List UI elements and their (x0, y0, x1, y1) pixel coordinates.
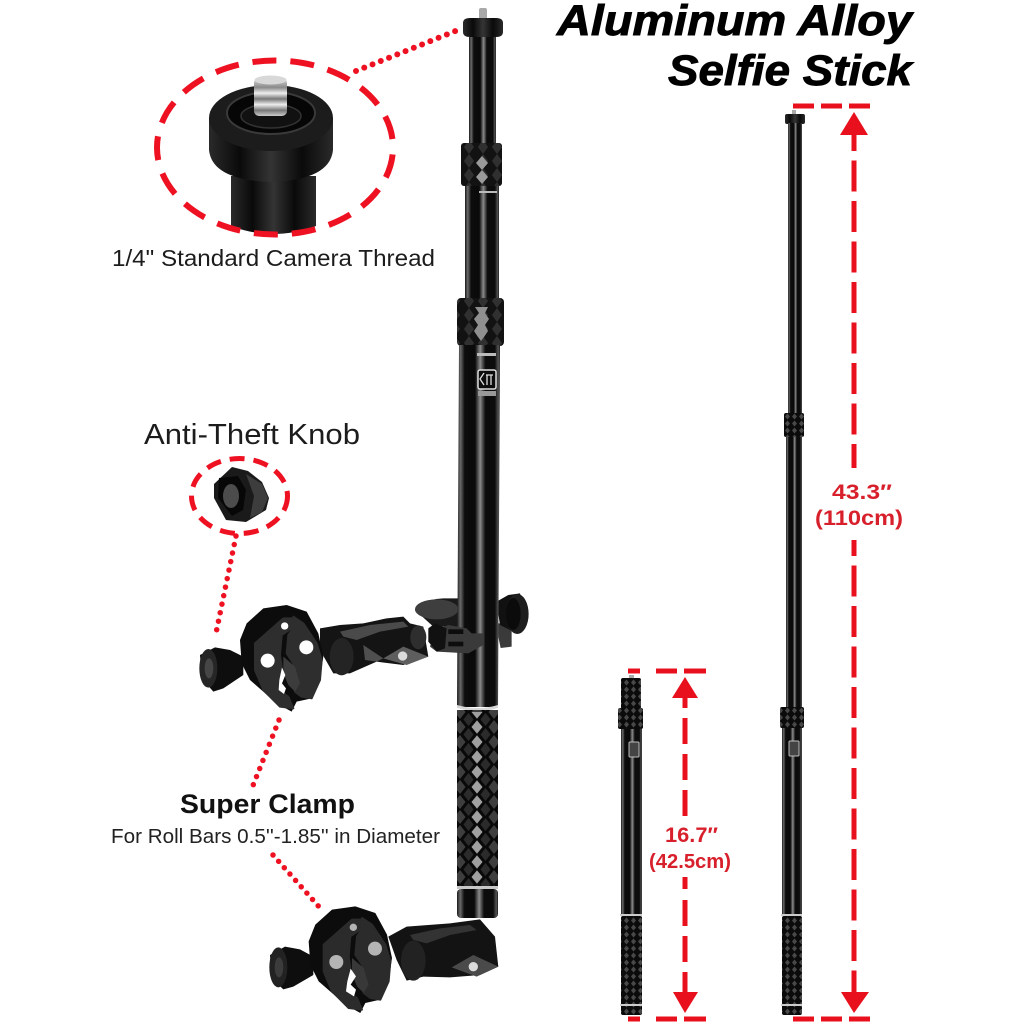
middle shaft (786, 437, 802, 708)
neck (231, 176, 316, 234)
thread caption: 1/4" Standard Camera Thread (112, 245, 435, 271)
shaft lower (682, 877, 688, 993)
middle shaft (465, 186, 499, 300)
brand mark (477, 353, 496, 356)
clamp opening (346, 969, 356, 996)
dotted leader: upper clamp to label (252, 720, 279, 788)
clamp right jaw (497, 623, 512, 648)
clamp left plate (324, 920, 362, 1010)
end ring (781, 1004, 802, 1006)
rear clamp ring (415, 598, 467, 627)
value inch: 43.3″ (832, 481, 892, 504)
collapsed stick, 16.7 inch (618, 675, 643, 1015)
clamp opening (279, 667, 286, 694)
cap (785, 114, 805, 124)
clamp jaw (352, 958, 369, 993)
side knob (497, 593, 529, 634)
lower collar (780, 707, 804, 728)
main telescopic pole (457, 8, 504, 918)
cap body (209, 85, 333, 182)
knob (199, 647, 243, 692)
clamp right plate (287, 617, 322, 698)
shaft upper (852, 120, 856, 468)
callout: anti-theft knob (192, 458, 288, 534)
arm (388, 919, 498, 981)
dotted leader: thread to cap (356, 30, 458, 71)
down arrow (673, 992, 698, 1013)
clamp top disk (415, 599, 458, 619)
logo (629, 742, 639, 757)
clamp jaw (283, 657, 300, 692)
down arrow (841, 992, 869, 1013)
dashed circle (192, 458, 288, 534)
knob icon (214, 467, 269, 522)
bottom bound (793, 1016, 870, 1022)
shaft upper (682, 698, 688, 817)
dotted leader: knob to clamp (215, 536, 236, 638)
anti-theft knob heading: Anti-Theft Knob (144, 419, 360, 451)
top thread (479, 8, 487, 19)
super clamp subtitle: For Roll Bars 0.5''-1.85'' in Diameter (111, 826, 440, 848)
clamp rear ring (309, 906, 392, 1013)
top bound (628, 668, 706, 674)
top bound (793, 104, 870, 108)
logo (789, 741, 799, 756)
middle collar (457, 298, 504, 346)
grip (621, 916, 642, 1015)
up arrow (840, 112, 868, 135)
bottom bound (628, 1016, 706, 1022)
lower shaft (782, 728, 802, 915)
lower shaft (457, 345, 500, 707)
silver ring (457, 705, 498, 711)
dashed circle (157, 60, 393, 234)
callout: camera thread close-up (157, 60, 393, 234)
upper super clamp (199, 605, 428, 712)
grip (782, 916, 802, 1015)
collar (618, 708, 643, 729)
clamp holes (329, 924, 382, 969)
clamp left plate (255, 618, 293, 708)
end ring (620, 1004, 642, 1006)
pole mount clamp, rear (415, 593, 529, 648)
lower super clamp (269, 906, 498, 1013)
upper collar (461, 143, 502, 186)
clamp rear ring (240, 605, 323, 712)
value inch: 16.7″ (665, 824, 718, 847)
value cm: (110cm) (815, 507, 903, 530)
top shaft (788, 123, 802, 414)
value cm: (42.5cm) (649, 851, 731, 873)
extended stick, 43.3 inch (780, 110, 805, 1015)
thread bolt (254, 76, 287, 116)
thread (792, 110, 796, 114)
top section (621, 678, 641, 709)
collar mark (479, 191, 497, 193)
clamp right plate (355, 918, 390, 1000)
dotted leader: label to lower clamp (273, 855, 321, 909)
top collar (784, 413, 804, 437)
lower rings (457, 886, 498, 918)
dimension: 16.7 inch (628, 671, 731, 1019)
up arrow (672, 677, 698, 698)
shaft lower (852, 540, 856, 992)
clamp body (309, 906, 392, 1013)
arm (320, 617, 428, 675)
top cap (463, 18, 503, 37)
dimension: 43.3 inch (793, 106, 903, 1019)
title (556, 0, 914, 95)
knob (269, 947, 313, 989)
grip ring (781, 914, 802, 916)
logo badge (478, 370, 496, 396)
pole mount clamp, front band (428, 623, 483, 653)
clamp holes (261, 622, 313, 668)
grip ring (620, 914, 642, 916)
shaft (621, 729, 642, 915)
super clamp heading: Super Clamp (180, 789, 355, 819)
upper shaft (469, 37, 496, 145)
diamond grip (457, 710, 498, 886)
title line 2: Selfie Stick (668, 47, 914, 95)
thread (629, 675, 634, 679)
